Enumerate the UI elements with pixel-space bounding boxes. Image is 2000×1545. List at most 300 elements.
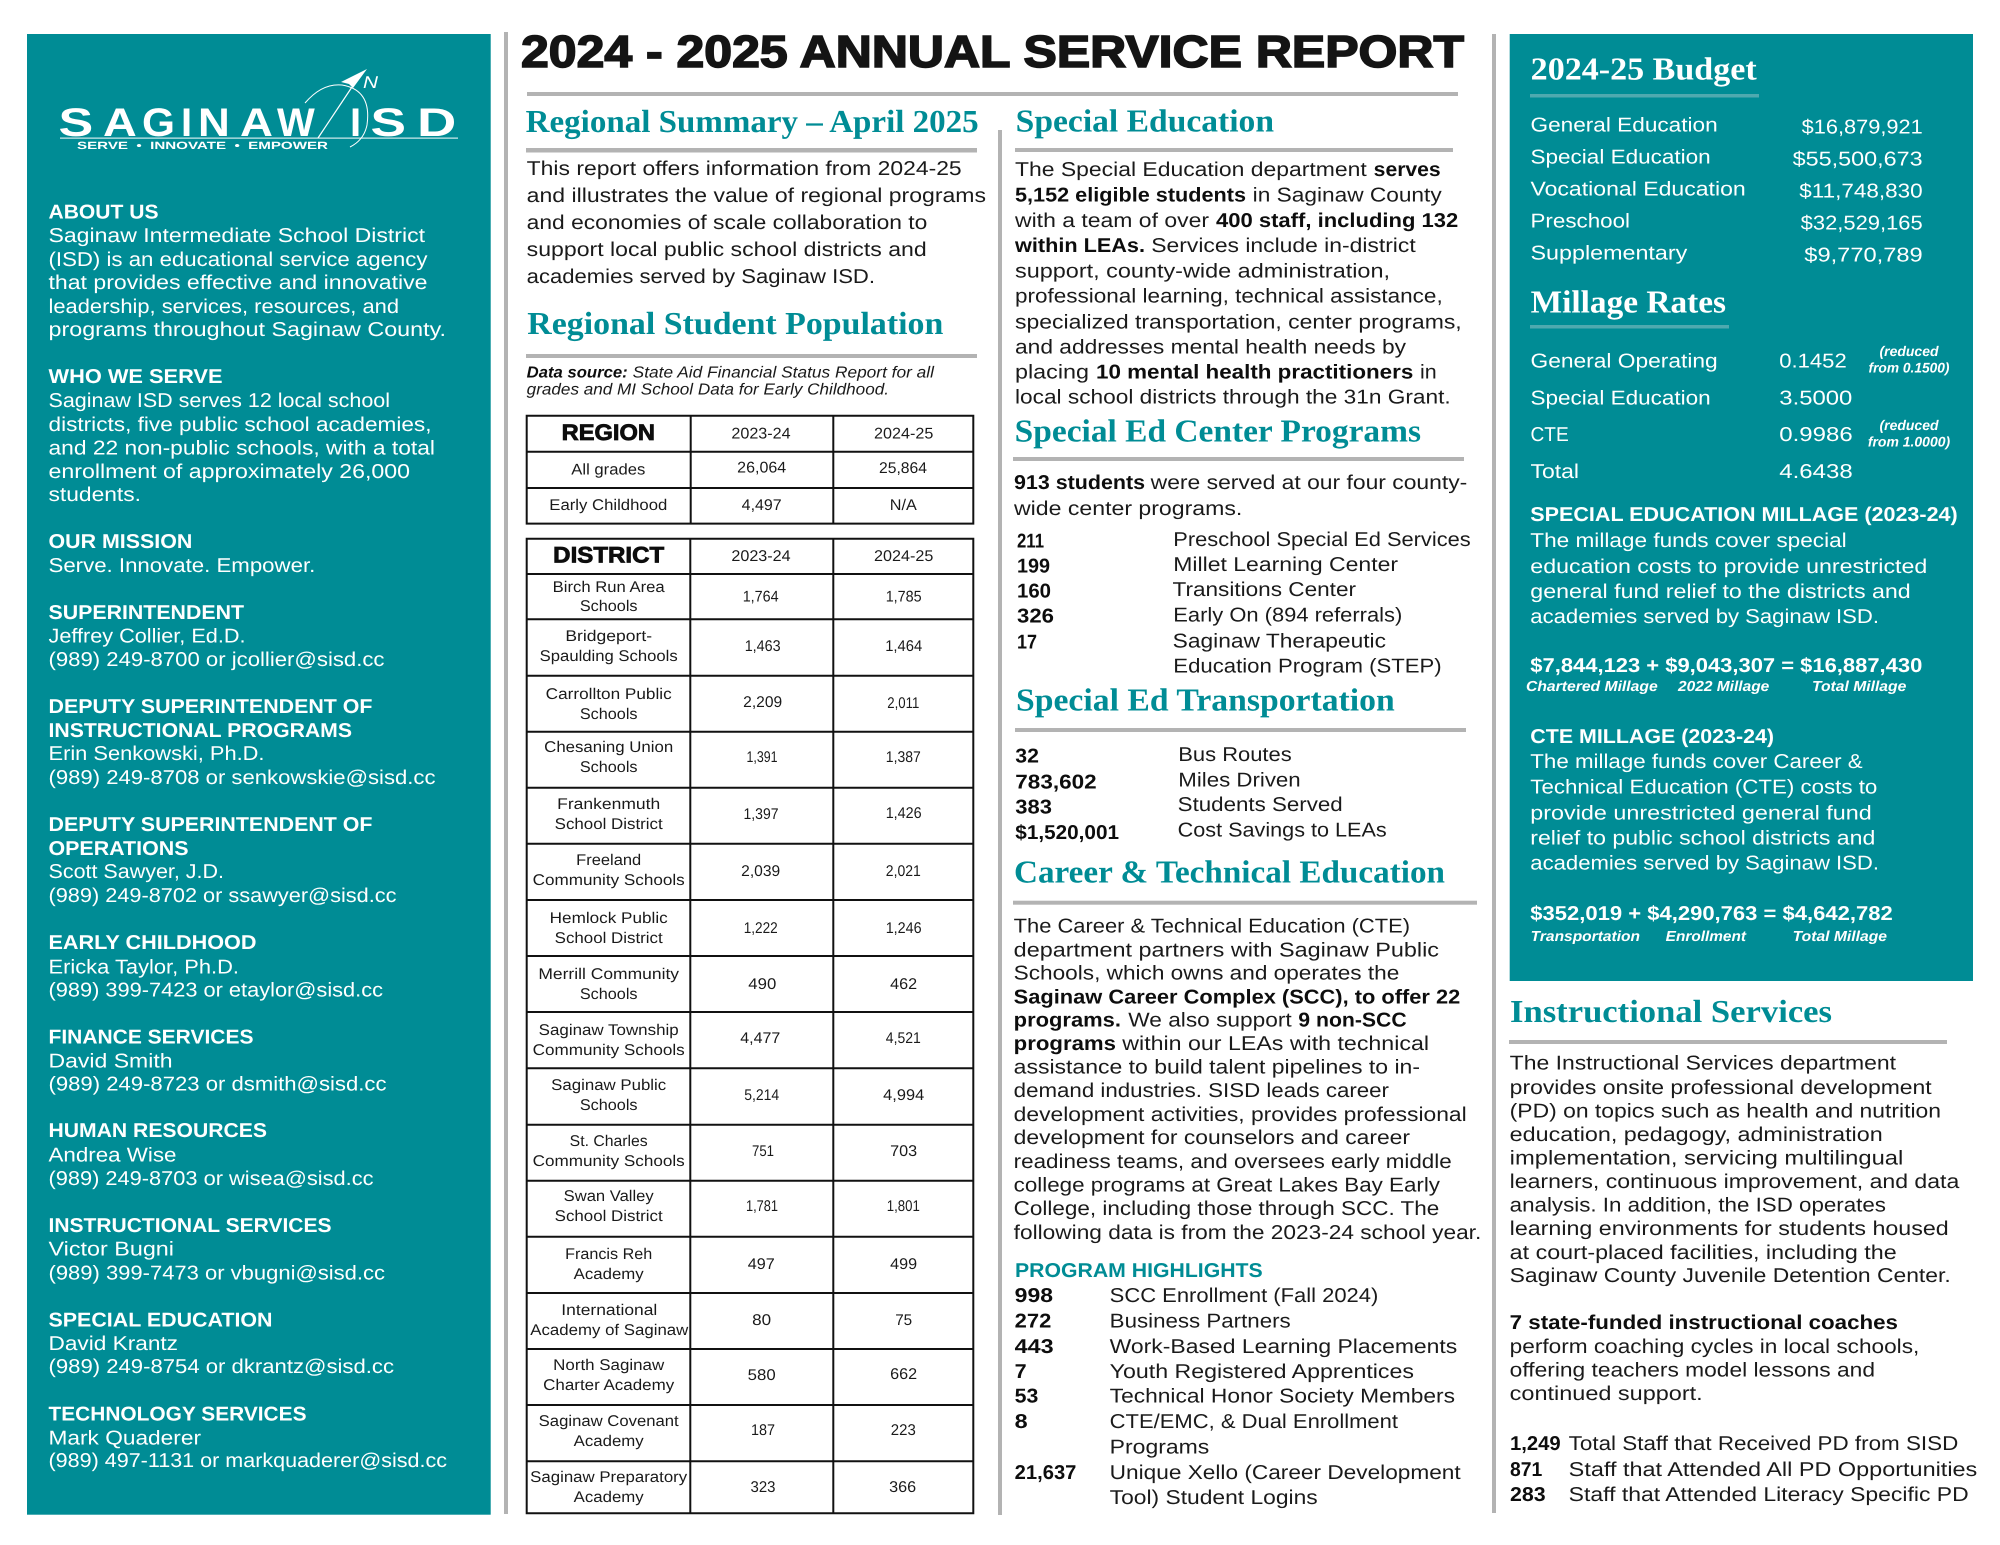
logo: Saginaw ISD: S: [58, 101, 93, 145]
professional development stats: [1510, 1433, 1977, 1506]
row: Saginaw Township Community Schools: 4,521: [886, 1030, 921, 1047]
instructional coaches text: perform coaching cycles in local schools,: [1510, 1336, 1919, 1358]
cte millage: academies served by Saginaw ISD.: [1530, 852, 1879, 874]
section: who we serve: and 22 non-public schools, with a total: [48, 437, 435, 459]
budget list: $9,770,789: [1804, 244, 1923, 266]
program highlights list: Business Partners: [1110, 1310, 1291, 1332]
row: North Saginaw Charter Academy: [543, 1357, 917, 1394]
special education millage: [1526, 504, 1958, 695]
logo: Saginaw ISD: G: [142, 101, 175, 145]
table: region: REGION: [562, 420, 655, 445]
row: Carrollton Public Schools: 2,209: [743, 694, 782, 711]
special education millage: academies served by Saginaw ISD.: [1530, 606, 1879, 628]
program highlights list: 21,637: [1015, 1462, 1076, 1484]
millage rates list: General Operating: [1530, 350, 1718, 372]
budget list: [1530, 114, 1923, 266]
section: special education contact: [48, 1310, 394, 1378]
section: instructional services: learning environments for students housed: [1510, 1218, 1949, 1240]
row: Chesaning Union Schools: [544, 739, 921, 776]
row: Freeland Community Schools: Freeland: [576, 852, 641, 869]
professional development stats: 871: [1510, 1459, 1542, 1481]
section: instructional services: learners, continuous improvement, and data: [1510, 1171, 1960, 1193]
row: Chesaning Union Schools: 1,387: [886, 749, 921, 766]
cte millage: CTE MILLAGE (2023-24): [1530, 726, 1774, 748]
section: career and technical education: programs.: [1014, 1010, 1121, 1032]
row: St. Charles Community Schools: Community Schools: [533, 1153, 685, 1170]
section: instructional services: analysis. In addition, the ISD operates: [1510, 1194, 1886, 1216]
row: North Saginaw Charter Academy: North Saginaw: [553, 1357, 665, 1374]
special education millage: SPECIAL EDUCATION MILLAGE (2023-24): [1530, 504, 1958, 526]
row: Freeland Community Schools: [533, 852, 921, 889]
section: special ed center programs: Early On (894 referrals): [1173, 604, 1402, 626]
row: Saginaw Public Schools: [551, 1077, 925, 1114]
section: special ed center programs: 211: [1017, 531, 1044, 553]
section: career and technical education: The Career & Technical Education (CTE): [1014, 915, 1410, 937]
row: Saginaw Public Schools: 4,994: [883, 1087, 925, 1104]
section: regional student population heading: [526, 305, 977, 398]
section: special ed center programs: Transitions Center: [1172, 579, 1356, 601]
section: instructional services contact: [48, 1215, 385, 1284]
special education millage: The millage funds cover special: [1530, 530, 1847, 552]
section: early childhood: Ericka Taylor, Ph.D.: [48, 956, 239, 978]
row: Chesaning Union Schools: 1,391: [746, 749, 778, 766]
section: special ed center programs: wide center programs.: [1013, 498, 1242, 520]
row: Birch Run Area Schools: [553, 579, 922, 615]
row: Merrill Community Schools: 490: [748, 976, 777, 993]
logo: Saginaw ISD: I: [181, 101, 192, 145]
section: technology services: (989) 497-1131 or markquaderer@sisd.cc: [48, 1450, 447, 1472]
program highlights list: 7: [1015, 1361, 1027, 1383]
section: superintendent: (989) 249-8700 or jcollier@sisd.cc: [48, 649, 384, 671]
instructional coaches text: offering teachers model lessons and: [1510, 1359, 1875, 1381]
section: special education: with a team of over: [1014, 210, 1209, 232]
row: Swan Valley School District: 1,781: [746, 1198, 778, 1215]
row: International Academy of Saginaw: International: [561, 1302, 657, 1319]
program highlights list: 272: [1015, 1310, 1051, 1332]
row: Hemlock Public School District: 1,222: [744, 920, 778, 937]
section: superintendent: [48, 602, 384, 671]
section: technology services: TECHNOLOGY SERVICES: [48, 1404, 306, 1426]
instructional coaches text: 7 state-funded instructional coaches: [1510, 1312, 1898, 1334]
professional development stats: 283: [1510, 1484, 1546, 1506]
section: career and technical education: development activities, provides professional: [1014, 1104, 1467, 1126]
row: Birch Run Area Schools: 1,764: [743, 588, 779, 605]
section: deputy superintendent of operations: (989) 249-8702 or ssawyer@sisd.cc: [48, 885, 396, 907]
section: career and technical education: We also support: [1128, 1010, 1292, 1032]
row: Swan Valley School District: Swan Valley: [564, 1188, 654, 1205]
row: Freeland Community Schools: 2,039: [741, 863, 780, 880]
section: deputy superintendent of instructional programs: [48, 696, 436, 789]
section: special education: 10 mental health practitioners: [1096, 361, 1413, 383]
section: who we serve: students.: [48, 484, 141, 506]
row: Bridgeport-Spaulding Schools: [540, 628, 923, 665]
section: career and technical education: College, including those through SCC. The: [1014, 1198, 1439, 1220]
section: special education: placing: [1015, 361, 1089, 383]
row: Saginaw Public Schools: Saginaw Public: [551, 1077, 666, 1094]
cte millage: Transportation: [1531, 929, 1640, 945]
section: superintendent: Jeffrey Collier, Ed.D.: [48, 626, 246, 648]
program highlights list: 8: [1015, 1411, 1028, 1433]
special education millage: Chartered Millage: [1526, 679, 1658, 695]
section: special ed transportation: [1015, 682, 1466, 844]
section: deputy superintendent of instructional programs: Erin Senkowski, Ph.D.: [48, 743, 264, 765]
professional development stats: Total Staff that Received PD from SISD: [1569, 1433, 1958, 1455]
row: St. Charles Community Schools: St. Charles: [570, 1133, 648, 1150]
row: Saginaw Covenant Academy: Academy: [574, 1433, 644, 1450]
section: instructional services contact: Victor Bugni: [48, 1238, 174, 1260]
row: International Academy of Saginaw: Academy of Saginaw: [530, 1322, 689, 1339]
section: special ed center programs: 326: [1017, 606, 1054, 628]
section: special education: specialized transportation, center programs,: [1015, 311, 1462, 333]
program highlights list: 53: [1015, 1386, 1038, 1408]
professional development stats: Staff that Attended Literacy Specific PD: [1569, 1484, 1969, 1506]
table: region: 2024-25: [874, 426, 933, 443]
row: Hemlock Public School District: [550, 910, 922, 947]
section: special ed transportation: Bus Routes: [1178, 744, 1292, 766]
section: career and technical education: college programs at Great Lakes Bay Early: [1014, 1174, 1440, 1196]
logo: Saginaw ISD: I: [350, 101, 361, 145]
section: special ed center programs: Millet Learning Center: [1173, 554, 1398, 576]
section: instructional services: (PD) on topics such as health and nutrition: [1510, 1100, 1941, 1122]
row: Chesaning Union Schools: Chesaning Union: [544, 739, 673, 756]
section: instructional services: Saginaw County Juvenile Detention Center.: [1510, 1265, 1951, 1287]
section: deputy superintendent of operations: DEPUTY SUPERINTENDENT OF: [48, 814, 372, 836]
row: Chesaning Union Schools: Schools: [580, 759, 638, 776]
row: International Academy of Saginaw: 80: [752, 1312, 772, 1329]
logo: Saginaw ISD: A: [103, 101, 137, 145]
budget list: Supplementary: [1530, 242, 1687, 264]
cte millage: Technical Education (CTE) costs to: [1530, 777, 1877, 799]
section: early childhood: [48, 932, 383, 1002]
budget list: Special Education: [1530, 146, 1711, 168]
row: Francis Reh Academy: [565, 1246, 917, 1283]
panel: budget and millage: [1510, 34, 1973, 981]
row: Francis Reh Academy: 499: [890, 1256, 917, 1273]
section: special education: Special Education: [1016, 103, 1274, 139]
section: career and technical education: readiness teams, and oversees early middle: [1014, 1151, 1452, 1173]
row: Birch Run Area Schools: 1,785: [886, 588, 922, 605]
millage rates list: 4.6438: [1779, 461, 1853, 483]
section: human resources: HUMAN RESOURCES: [48, 1120, 267, 1142]
section: regional summary: Regional Summary – April 2025: [526, 103, 979, 140]
section: finance services: David Smith: [48, 1051, 172, 1073]
section: instructional services: at court-placed facilities, including the: [1510, 1242, 1897, 1264]
row: Swan Valley School District: School District: [555, 1208, 663, 1225]
section: early childhood: (989) 399-7423 or etaylor@sisd.cc: [48, 980, 383, 1002]
section: special education: Services include in-district: [1151, 235, 1416, 257]
section: special ed center programs: [1013, 413, 1471, 677]
special education millage: Total Millage: [1812, 679, 1906, 695]
section: deputy superintendent of operations: OPERATIONS: [48, 838, 188, 860]
section: early childhood: EARLY CHILDHOOD: [48, 932, 256, 954]
budget list: $11,748,830: [1799, 180, 1923, 202]
section: about us: (ISD) is an educational service agency: [48, 249, 427, 271]
section: instructional services: provides onsite professional development: [1510, 1077, 1932, 1099]
logo: Saginaw ISD: S: [370, 101, 406, 145]
instructional coaches text: [1510, 1312, 1919, 1405]
heading: 2024-25 budget: 2024-25 Budget: [1531, 50, 1757, 87]
section: who we serve: WHO WE SERVE: [48, 366, 222, 388]
section: who we serve: Saginaw ISD serves 12 local school: [48, 390, 390, 412]
section: instructional services: implementation, servicing multilingual: [1510, 1147, 1903, 1169]
row: Frankenmuth School District: 1,397: [744, 806, 778, 823]
section: special education: within LEAs.: [1014, 235, 1145, 257]
section: regional student population heading: grades and MI School Data for Early Childhood.: [527, 381, 889, 398]
program highlights list: Tool) Student Logins: [1110, 1487, 1318, 1509]
section: instructional services contact: INSTRUCTIONAL SERVICES: [48, 1215, 332, 1237]
row: Saginaw Township Community Schools: [533, 1022, 921, 1059]
logo: Saginaw ISD: W: [277, 101, 315, 145]
row: St. Charles Community Schools: 751: [752, 1143, 774, 1160]
section: instructional services: education, pedagogy, administration: [1510, 1124, 1883, 1146]
logo: Saginaw ISD: A: [240, 101, 273, 145]
section: career and technical education: Career & Technical Education: [1014, 854, 1445, 890]
section: special ed transportation: Cost Savings to LEAs: [1178, 819, 1387, 841]
millage rates list: (reduced: [1880, 417, 1939, 433]
section: finance services: (989) 249-8723 or dsmith@sisd.cc: [48, 1073, 386, 1095]
section: career and technical education: [1013, 854, 1481, 1509]
section: special education contact: SPECIAL EDUCATION: [48, 1310, 272, 1332]
title: 2024 - 2025 ANNUAL SERVICE REPORT: [521, 26, 1464, 77]
row: Francis Reh Academy: Francis Reh: [565, 1246, 652, 1263]
section: special education: [1014, 103, 1462, 408]
row: Birch Run Area Schools: Birch Run Area: [553, 579, 665, 596]
row: North Saginaw Charter Academy: 580: [748, 1367, 776, 1384]
millage rates list: Special Education: [1530, 387, 1711, 409]
section: career and technical education: assistance to build talent pipelines to in-: [1014, 1057, 1420, 1079]
section: career and technical education: development for counselors and career: [1014, 1127, 1410, 1149]
row: Saginaw Preparatory Academy: Saginaw Preparatory: [530, 1469, 687, 1486]
row: Carrollton Public Schools: [546, 686, 919, 723]
cte millage: provide unrestricted general fund: [1530, 802, 1872, 824]
row: Freeland Community Schools: 2,021: [886, 863, 921, 880]
section: special education contact: David Krantz: [48, 1333, 178, 1355]
program highlights list: SCC Enrollment (Fall 2024): [1110, 1285, 1378, 1307]
row: Carrollton Public Schools: Carrollton Public: [546, 686, 672, 703]
section: instructional services: [1509, 993, 1977, 1506]
section: about us: ABOUT US: [48, 202, 158, 224]
millage rates list: 0.9986: [1779, 424, 1853, 446]
millage rates list: from 1.0000): [1868, 434, 1950, 450]
row: Saginaw Public Schools: 5,214: [744, 1087, 780, 1104]
section: about us: leadership, services, resources, and: [48, 296, 399, 318]
row: Saginaw Township Community Schools: Community Schools: [533, 1042, 685, 1059]
row: Saginaw Covenant Academy: Saginaw Covenant: [539, 1413, 679, 1430]
table: region: 26,064: [737, 460, 787, 476]
section: special ed center programs: Saginaw Therapeutic: [1173, 630, 1386, 652]
program highlights list: Work-Based Learning Placements: [1110, 1336, 1457, 1358]
row: Swan Valley School District: [555, 1188, 920, 1225]
section: deputy superintendent of operations: [48, 814, 396, 907]
section: our mission: [48, 531, 315, 577]
section: regional student population heading: Regional Student Population: [527, 305, 944, 342]
professional development stats: 1,249: [1510, 1433, 1561, 1455]
district header row: [553, 543, 933, 568]
row: Saginaw Preparatory Academy: 366: [889, 1479, 916, 1496]
section: special ed transportation: Miles Driven: [1178, 769, 1301, 791]
budget list: $32,529,165: [1801, 212, 1923, 234]
program highlights list: [1015, 1260, 1461, 1509]
section: instructional services contact: (989) 399-7473 or vbugni@sisd.cc: [48, 1262, 385, 1284]
row: St. Charles Community Schools: 703: [890, 1143, 917, 1160]
table: district: [527, 539, 973, 1513]
section: special education: serves: [1374, 159, 1441, 181]
row: Saginaw Township Community Schools: 4,477: [740, 1030, 780, 1047]
section: special ed transportation: 783,602: [1015, 772, 1097, 794]
section: regional summary: support local public school districts and: [527, 239, 927, 261]
program highlights list: 998: [1015, 1285, 1053, 1307]
row: Bridgeport-Spaulding Schools: 1,463: [745, 638, 781, 655]
section: career and technical education: demand industries. SISD leads career: [1014, 1080, 1389, 1102]
section: deputy superintendent of operations: Scott Sawyer, J.D.: [48, 861, 224, 883]
table: region: N/A: [890, 497, 917, 514]
section: about us: [48, 202, 446, 341]
section: special education: local school districts through the 31n Grant.: [1015, 386, 1451, 408]
instructional coaches text: continued support.: [1510, 1383, 1703, 1405]
row: Birch Run Area Schools: Schools: [580, 598, 638, 615]
table: region: 25,864: [879, 460, 927, 477]
row: Freeland Community Schools: Community Schools: [533, 872, 685, 889]
section: technology services: Mark Quaderer: [48, 1428, 201, 1450]
budget list: $16,879,921: [1802, 116, 1923, 138]
row: North Saginaw Charter Academy: Charter Academy: [543, 1377, 674, 1394]
budget list: Preschool: [1530, 210, 1630, 232]
special education millage: $7,844,123 + $9,043,307 = $16,887,430: [1530, 655, 1922, 677]
district header row: 2023-24: [731, 548, 791, 565]
row: Bridgeport-Spaulding Schools: Spaulding Schools: [540, 648, 678, 665]
panel: about sidebar: [27, 34, 491, 1515]
section: finance services: [48, 1026, 386, 1095]
section: human resources: (989) 249-8703 or wisea@sisd.cc: [48, 1168, 374, 1190]
row: Hemlock Public School District: Hemlock Public: [550, 910, 668, 927]
section: special education: The Special Education department: [1015, 159, 1367, 181]
millage rates list: Total: [1530, 461, 1579, 483]
program highlights list: CTE/EMC, & Dual Enrollment: [1110, 1411, 1398, 1433]
millage rates list: (reduced: [1880, 343, 1939, 359]
section: who we serve: districts, five public school academies,: [48, 414, 432, 436]
section: regional summary: and illustrates the value of regional programs: [527, 185, 986, 207]
section: career and technical education: Schools, which owns and operates the: [1014, 962, 1399, 984]
cte millage: $352,019 + $4,290,763 = $4,642,782: [1530, 903, 1893, 925]
section: special ed transportation: 32: [1015, 746, 1039, 768]
section: special ed center programs: were served at our four county-: [1150, 472, 1467, 494]
program highlights list: 443: [1015, 1336, 1054, 1358]
row: Bridgeport-Spaulding Schools: Bridgeport-: [565, 628, 652, 645]
section: special education: support, county-wide administration,: [1015, 260, 1390, 282]
cte millage: Total Millage: [1793, 929, 1887, 945]
section: instructional services: Instructional Services: [1510, 993, 1832, 1029]
heading: millage rates: Millage Rates: [1531, 284, 1726, 321]
row: Merrill Community Schools: Schools: [580, 986, 638, 1003]
millage rates list: 0.1452: [1779, 350, 1847, 372]
cte millage: relief to public school districts and: [1530, 827, 1875, 849]
budget list: $55,500,673: [1793, 148, 1923, 170]
section: career and technical education: within our LEAs with technical: [1121, 1033, 1429, 1055]
logo: Saginaw ISD: D: [417, 101, 456, 145]
row: Merrill Community Schools: 462: [890, 976, 917, 993]
millage rates list: 3.5000: [1779, 387, 1852, 409]
row: St. Charles Community Schools: [533, 1133, 917, 1170]
logo: Saginaw ISD: N: [363, 73, 379, 92]
section: career and technical education: department partners with Saginaw Public: [1014, 939, 1439, 961]
section: human resources: [48, 1120, 374, 1190]
table: region: 4,497: [742, 497, 782, 514]
millage rates list: CTE: [1530, 424, 1569, 446]
section: who we serve: [48, 366, 435, 506]
section: special education: professional learning, technical assistance,: [1015, 285, 1443, 307]
row: Hemlock Public School District: 1,246: [886, 920, 922, 937]
section: special ed transportation: Students Served: [1178, 794, 1343, 816]
section: regional summary: academies served by Saginaw ISD.: [527, 266, 875, 288]
section: deputy superintendent of instructional programs: INSTRUCTIONAL PROGRAMS: [48, 720, 352, 742]
cte millage: The millage funds cover Career &: [1530, 751, 1863, 773]
millage rates list: from 0.1500): [1868, 360, 1950, 376]
millage rates list: [1530, 343, 1950, 483]
row: Saginaw Township Community Schools: Saginaw Township: [539, 1022, 679, 1039]
section: finance services: FINANCE SERVICES: [48, 1026, 254, 1048]
program highlights list: Programs: [1110, 1436, 1209, 1458]
section: special ed center programs: Preschool Special Ed Services: [1173, 529, 1471, 551]
section: career and technical education: 9 non-SCC: [1298, 1010, 1407, 1032]
row: Carrollton Public Schools: 2,011: [887, 695, 919, 712]
section: deputy superintendent of instructional programs: (989) 249-8708 or senkowskie@sisd.cc: [48, 767, 436, 789]
row: Saginaw Preparatory Academy: [530, 1469, 916, 1506]
row: Frankenmuth School District: Frankenmuth: [557, 796, 660, 813]
section: instructional services: The Instructional Services department: [1510, 1052, 1897, 1074]
section: special ed center programs: Education Program (STEP): [1173, 655, 1442, 677]
section: our mission: OUR MISSION: [48, 531, 192, 553]
section: special education: and addresses mental health needs by: [1015, 336, 1406, 358]
section: about us: programs throughout Saginaw County.: [48, 319, 446, 341]
logo: Saginaw ISD: N: [198, 101, 230, 145]
section: special ed transportation: Special Ed Transportation: [1016, 682, 1395, 718]
table: region: 2023-24: [731, 426, 791, 443]
row: Frankenmuth School District: School District: [555, 816, 663, 833]
section: special ed transportation: $1,520,001: [1015, 822, 1119, 844]
section: special education: in Saginaw County: [1253, 184, 1442, 206]
row: Saginaw Covenant Academy: [539, 1413, 916, 1450]
row: Frankenmuth School District: 1,426: [886, 805, 922, 822]
budget list: General Education: [1530, 114, 1718, 136]
section: special education: in: [1420, 361, 1437, 383]
cte millage: Enrollment: [1666, 929, 1747, 945]
logo: Saginaw ISD: SERVE • INNOVATE • EMPOWER: [77, 140, 329, 152]
table: region: [527, 416, 973, 524]
table: region: Early Childhood: [549, 497, 667, 514]
row: Merrill Community Schools: [538, 966, 917, 1003]
section: special ed center programs: 913 students: [1014, 472, 1145, 494]
row: Hemlock Public School District: School District: [555, 930, 663, 947]
section: deputy superintendent of instructional programs: DEPUTY SUPERINTENDENT OF: [48, 696, 372, 718]
special education millage: 2022 Millage: [1677, 679, 1769, 695]
district header row: 2024-25: [874, 548, 933, 565]
special education millage: education costs to provide unrestricted: [1530, 556, 1927, 578]
section: about us: that provides effective and innovative: [48, 272, 428, 294]
section: career and technical education: Saginaw Career Complex (SCC), to offer 22: [1014, 986, 1460, 1008]
section: special education: 400 staff, including 132: [1216, 210, 1458, 232]
section: regional student population heading: State Aid Financial Status Report for all: [633, 364, 934, 382]
section: special education: 5,152 eligible students: [1015, 184, 1246, 206]
program highlights list: Unique Xello (Career Development: [1110, 1462, 1461, 1484]
section: who we serve: enrollment of approximately 26,000: [48, 461, 410, 483]
program highlights list: Technical Honor Society Members: [1110, 1386, 1455, 1408]
section: special ed center programs: 17: [1017, 632, 1037, 654]
section: career and technical education: following data is from the 2023-24 school year.: [1014, 1222, 1481, 1244]
row: Swan Valley School District: 1,801: [887, 1198, 920, 1215]
section: regional summary: [526, 103, 986, 288]
cte millage: [1530, 726, 1893, 945]
section: special education contact: (989) 249-8754 or dkrantz@sisd.cc: [48, 1356, 394, 1378]
